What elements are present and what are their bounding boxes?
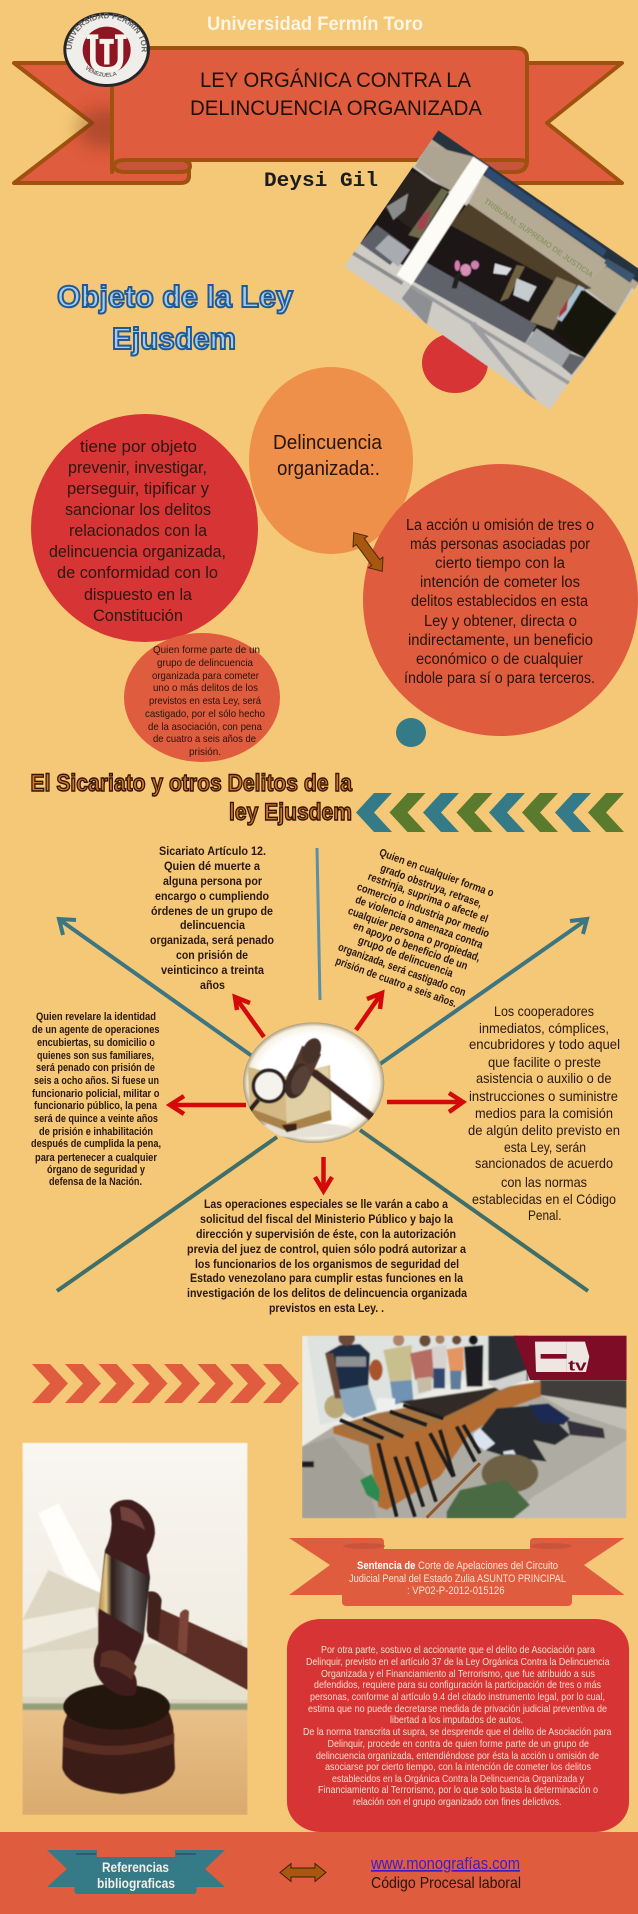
text: cooperators: medios para la comisión	[475, 1105, 613, 1121]
text: identity disclosure offence: encubiertas, su domicilio o	[37, 1037, 155, 1049]
rotated text: obstruction offence	[334, 847, 496, 1010]
rotated text: obstruction offence: grupo de delincuencia	[356, 934, 455, 980]
panel: objeto de la ley circle	[31, 414, 258, 642]
panel: penalty small circle: Quien forme parte de un	[153, 644, 260, 656]
heading: El Sicariato y otros Delitos: El Sicariato y otros Delitos de la	[30, 770, 353, 797]
text: cooperators: Penal.	[528, 1207, 562, 1223]
rotated text: obstruction offence: Quien en cualquier forma o	[378, 847, 496, 900]
reference link: www.monografías.com	[370, 1854, 520, 1873]
panel: court ruling text: Organizada y el Financiamiento al Terrorismo, que fue atribuido a sus	[321, 1668, 595, 1680]
text: cooperators: asistencia o auxilio o de	[476, 1070, 612, 1086]
text: identity disclosure offence: será penado con prisión de	[36, 1062, 155, 1074]
decorative red circle	[422, 333, 488, 393]
rotated text: obstruction offence: grado obstruya, retrase,	[379, 862, 483, 910]
ribbon text	[349, 1560, 566, 1597]
rotated text: obstruction offence: prisión de cuatro a seis años.	[334, 955, 458, 1010]
photo: seized weapons news image	[302, 1331, 627, 1518]
ribbon text: Sentencia de Corte de Apelaciones del Circuito	[357, 1560, 558, 1572]
text: identity disclosure offence: Quien revelare la identidad	[36, 1011, 156, 1023]
text: identity disclosure offence: órgano de seguridad y	[47, 1164, 146, 1176]
panel: objeto de la ley circle: sancionar los delitos	[65, 500, 211, 519]
panel: objeto de la ley circle: dispuesto en la	[84, 585, 193, 604]
text: identity disclosure offence: funcionario público, la pena	[34, 1100, 158, 1112]
text: Sicariato Artículo 12: organizada, será penado	[150, 933, 274, 947]
arrow: red left	[170, 1096, 246, 1114]
panel: objeto de la ley circle: Constitución	[93, 606, 183, 625]
text: Sicariato Artículo 12: alguna persona por	[163, 874, 262, 888]
text: cooperators: que facilite o preste	[488, 1054, 601, 1070]
panel: court ruling text: Delinquir, procede en contra de quien forme parte de un grupo de	[328, 1738, 589, 1750]
panel: court ruling text: relación con el grupo organizado con fines delictivos.	[353, 1796, 562, 1808]
heading: Objeto de la Ley Ejusdem: Objeto de la Ley	[57, 279, 294, 314]
banner title text	[190, 69, 482, 120]
references ribbon	[47, 1850, 225, 1894]
text: identity disclosure offence: será de quince a veinte años	[34, 1113, 158, 1125]
arrow: red up left	[235, 997, 264, 1037]
reference text: Código Procesal laboral	[371, 1875, 521, 1892]
panel: definition circle: más personas asociadas por	[410, 536, 590, 553]
heading: El Sicariato y otros Delitos: ley Ejusdem	[229, 799, 352, 826]
photo: seized weapons news image: tv	[568, 1359, 588, 1375]
text: Sicariato Artículo 12: Quien dé muerte a	[164, 859, 260, 873]
arrow: teal lower right	[360, 1130, 588, 1291]
icon: university logo	[63, 12, 150, 87]
panel: definition circle: indirectamente, un beneficio	[408, 632, 593, 649]
panel: penalty small circle: prisión.	[189, 746, 221, 758]
panel: definition circle: cierto tiempo con la	[435, 555, 565, 572]
text: special operations: los funcionarios de los organismos de seguridad del	[195, 1257, 459, 1271]
panel: penalty small circle: uno o más delitos de los	[153, 682, 258, 694]
text: cooperators: instrucciones o suministre	[469, 1088, 618, 1104]
header university name: Universidad Fermín Toro	[207, 14, 423, 35]
panel: court ruling text: establecidos en la Orgánica Contra la Delincuencia Organizada y	[332, 1773, 585, 1785]
panel: court ruling text: libertad a los imputados de autos.	[390, 1714, 523, 1726]
text: special operations	[187, 1197, 467, 1315]
text: special operations: Estado venezolano para cumplir estas funciones en la	[190, 1271, 463, 1285]
panel: definition circle: económico o de cualquier	[416, 651, 583, 668]
text: cooperators: con las normas	[501, 1174, 587, 1190]
text: Sicariato Artículo 12: veinticinco a treinta	[161, 963, 264, 977]
photo: court building	[344, 130, 638, 410]
panel: objeto de la ley circle: de conformidad con lo	[57, 563, 218, 582]
ribbon text: : VP02-P-2012-015126	[407, 1585, 504, 1597]
text: special operations: Las operaciones especiales se lle varán a cabo a	[204, 1197, 448, 1211]
text: cooperators: inmediatos, cómplices,	[479, 1020, 609, 1036]
heading: Objeto de la Ley Ejusdem	[57, 279, 294, 356]
arrow: red right	[387, 1093, 463, 1112]
rotated text: obstruction offence: comercio o industria por medio	[355, 881, 491, 940]
panel: definition circle: índole para sí o para terceros.	[404, 670, 595, 687]
panel: penalty small circle: castigado, por el sólo hecho	[145, 708, 265, 720]
panel: Delincuencia organizada circle: Delincuencia	[273, 432, 383, 454]
arrow: red down	[315, 1157, 332, 1191]
panel: penalty small circle: de cuatro a seis años de	[153, 733, 256, 745]
panel: penalty small circle: previstos en esta Ley, será	[149, 695, 261, 707]
icon: diagonal double arrow	[347, 527, 389, 577]
heading: El Sicariato y otros Delitos	[30, 770, 353, 826]
arrow: teal lower left	[57, 1137, 277, 1291]
panel: court ruling text: Por otra parte, sostuvo el accionante que el delito de Asociación para	[321, 1644, 595, 1656]
panel: definition circle: delitos establecidos en esta	[411, 593, 588, 610]
footer band	[0, 1832, 638, 1914]
icon: horizontal double arrow	[280, 1864, 326, 1882]
text: special operations: previstos en esta Ley. .	[269, 1301, 384, 1315]
panel: court ruling text: asociarse por cierto tiempo, con la intención de cometer los delitos	[325, 1761, 591, 1773]
panel: objeto de la ley circle: prevenir, investigar,	[68, 458, 207, 477]
vertical divider line	[317, 848, 320, 1000]
text: identity disclosure offence: de prisión e inhabilitación	[39, 1126, 153, 1138]
panel: Delincuencia organizada circle: organizada:.	[277, 458, 380, 480]
text: special operations: previa del juez de control, quien sólo podrá autorizar a	[187, 1242, 466, 1256]
text: cooperators: establecidas en el Código	[472, 1191, 616, 1207]
rotated text: obstruction offence: de violencia o amenaza contra	[354, 894, 485, 952]
arrow: teal upper right	[380, 919, 587, 1064]
chevrons pointing right	[32, 1364, 299, 1403]
text: Sicariato Artículo 12: Sicariato Artículo 12.	[159, 844, 266, 858]
author name: Deysi Gil	[264, 170, 378, 193]
photo: court building: TRIBUNAL SUPREMO DE JUSTICIA	[482, 197, 595, 280]
panel: penalty small circle: de la asociación, con pena	[148, 721, 262, 733]
arrow: teal upper left	[59, 919, 252, 1056]
arrow: red up right	[356, 993, 382, 1030]
rotated text: obstruction offence: cualquier persona o propiedad,	[346, 905, 482, 964]
text: cooperators	[468, 1003, 620, 1223]
panel: penalty small circle: grupo de delincuencia	[157, 657, 253, 669]
heading: Objeto de la Ley Ejusdem: Ejusdem	[112, 321, 236, 356]
references ribbon: Referencias	[102, 1859, 169, 1875]
banner title text: DELINCUENCIA ORGANIZADA	[190, 97, 482, 120]
panel: penalty small circle	[124, 633, 280, 762]
text: identity disclosure offence: de un agente de operaciones	[32, 1024, 160, 1036]
rotated text: obstruction offence: restrinja, suprima o afecte el	[366, 871, 490, 926]
decorative teal dot	[396, 718, 426, 747]
text: identity disclosure offence: seis a ocho años. Si fuese un	[34, 1075, 159, 1087]
panel: objeto de la ley circle: delincuencia organizada,	[49, 542, 226, 561]
text: Sicariato Artículo 12: órdenes de un grupo de	[151, 904, 273, 918]
text: identity disclosure offence: funcionario policial, militar o	[32, 1088, 160, 1100]
panel: objeto de la ley circle: tiene por objeto	[80, 437, 197, 456]
text: cooperators: encubridores y todo aquel	[469, 1036, 620, 1052]
text: special operations: solicitud del fiscal del Ministerio Público y bajo la	[200, 1212, 453, 1226]
text: Sicariato Artículo 12: años	[200, 978, 225, 992]
panel: court ruling text: Financiamiento al Terrorismo, por lo que solo basta la determinación o	[318, 1784, 598, 1796]
text: Sicariato Artículo 12: con prisión de	[176, 948, 248, 962]
text: identity disclosure offence	[31, 1011, 161, 1188]
text: cooperators: sancionados de acuerdo	[475, 1155, 613, 1171]
panel: definition circle: La acción u omisión de tres o	[406, 517, 594, 534]
text: cooperators: de algún delito previsto en	[468, 1122, 620, 1138]
text: identity disclosure offence: después de cumplida la pena,	[31, 1138, 161, 1150]
text: identity disclosure offence: quienes son sus familiares,	[37, 1050, 154, 1062]
title banner	[14, 48, 622, 183]
text: Sicariato Artículo 12: encargo o cumpliendo	[155, 889, 269, 903]
text: Sicariato Artículo 12	[150, 844, 274, 992]
panel: Delincuencia organizada circle	[249, 367, 413, 554]
panel: objeto de la ley circle: perseguir, tipificar y	[67, 479, 209, 498]
chevrons pointing left	[356, 793, 624, 832]
rotated text: obstruction offence: en apoyo o beneficio de un	[351, 920, 469, 973]
ribbon: sentencia	[289, 1538, 625, 1606]
text: identity disclosure offence: defensa de la Nación.	[49, 1176, 142, 1188]
rotated text: obstruction offence: organizada, será castigado con	[336, 941, 468, 999]
text: cooperators: Los cooperadores	[494, 1003, 594, 1019]
text: identity disclosure offence: para pertenecer a cualquier	[35, 1152, 158, 1164]
panel: court ruling text	[287, 1619, 629, 1832]
panel: penalty small circle: organizada para cometer	[152, 670, 259, 682]
text: special operations: investigación de los delitos de delincuencia organizada	[187, 1286, 467, 1300]
references ribbon: bibliograficas	[97, 1875, 175, 1891]
text: Sicariato Artículo 12: delincuencia	[180, 918, 245, 932]
ribbon text: Judicial Penal del Estado Zulia ASUNTO PRINCIPAL	[349, 1573, 566, 1585]
panel: definition circle: intención de cometer los	[420, 574, 580, 591]
text: cooperators: esta Ley, serán	[504, 1139, 586, 1155]
photo: central gavel, book and magnifier	[243, 1022, 384, 1143]
icon: university logo: VENEZUELA	[86, 66, 117, 77]
text: special operations: dirección y supervisión de éste, con la autorización	[196, 1227, 456, 1241]
banner title text: LEY ORGÁNICA CONTRA LA	[200, 69, 471, 92]
panel: objeto de la ley circle: relacionados con la	[69, 521, 208, 540]
panel: definition circle	[363, 464, 638, 736]
photo: large gavel	[22, 1443, 248, 1815]
panel: definition circle: Ley y obtener, directa o	[424, 613, 577, 630]
